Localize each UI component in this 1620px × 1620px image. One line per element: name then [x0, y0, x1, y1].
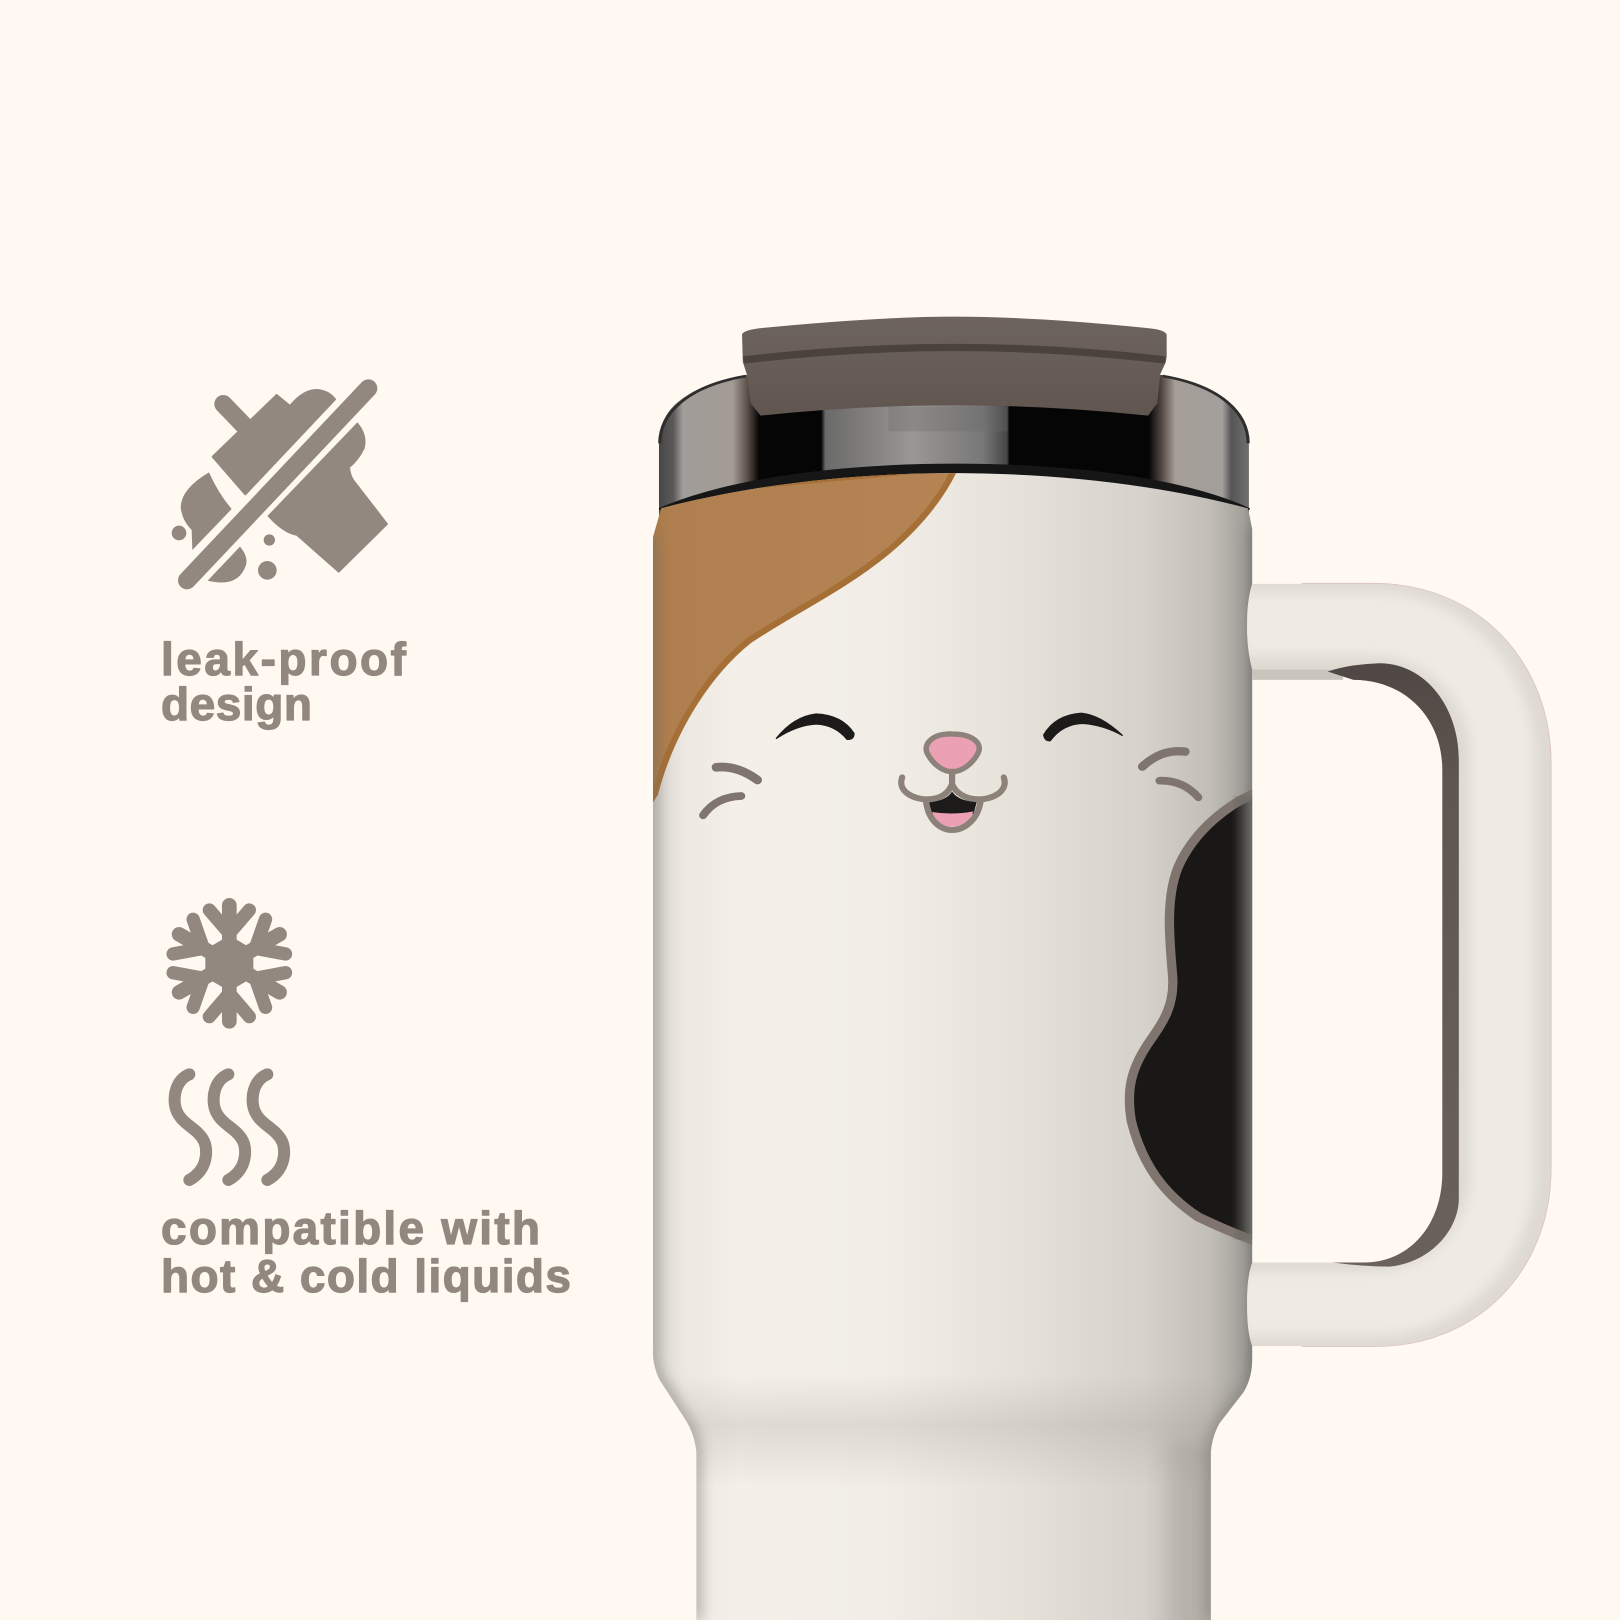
label: compatible with hot and cold liquids: compatible with	[161, 1202, 540, 1254]
icon: crossed-out leak splash	[172, 388, 387, 583]
tumbler	[641, 317, 1560, 1620]
label: leak-proof design	[161, 633, 407, 730]
feature: hot and cold compatibility	[161, 905, 571, 1302]
orange patch	[641, 467, 956, 816]
handle	[1240, 573, 1560, 1359]
mouth	[901, 772, 1005, 830]
tumbler rim and lid base	[659, 375, 1249, 520]
nose	[926, 734, 979, 772]
label: leak-proof design: design	[161, 678, 312, 730]
label: leak-proof design: leak-proof	[161, 633, 407, 685]
whiskers	[703, 751, 1198, 815]
icon: snowflake	[169, 905, 290, 1021]
feature: leak-proof design	[161, 388, 407, 730]
cat face	[703, 713, 1198, 830]
label: compatible with hot and cold liquids: hot & cold liquids	[161, 1250, 571, 1302]
icon: heat waves	[175, 1074, 284, 1180]
tumbler lid	[742, 317, 1167, 416]
eyes	[776, 713, 1122, 741]
black patch	[1129, 789, 1266, 1245]
label: compatible with hot and cold liquids	[161, 1202, 571, 1302]
tumbler body	[641, 467, 1266, 1620]
